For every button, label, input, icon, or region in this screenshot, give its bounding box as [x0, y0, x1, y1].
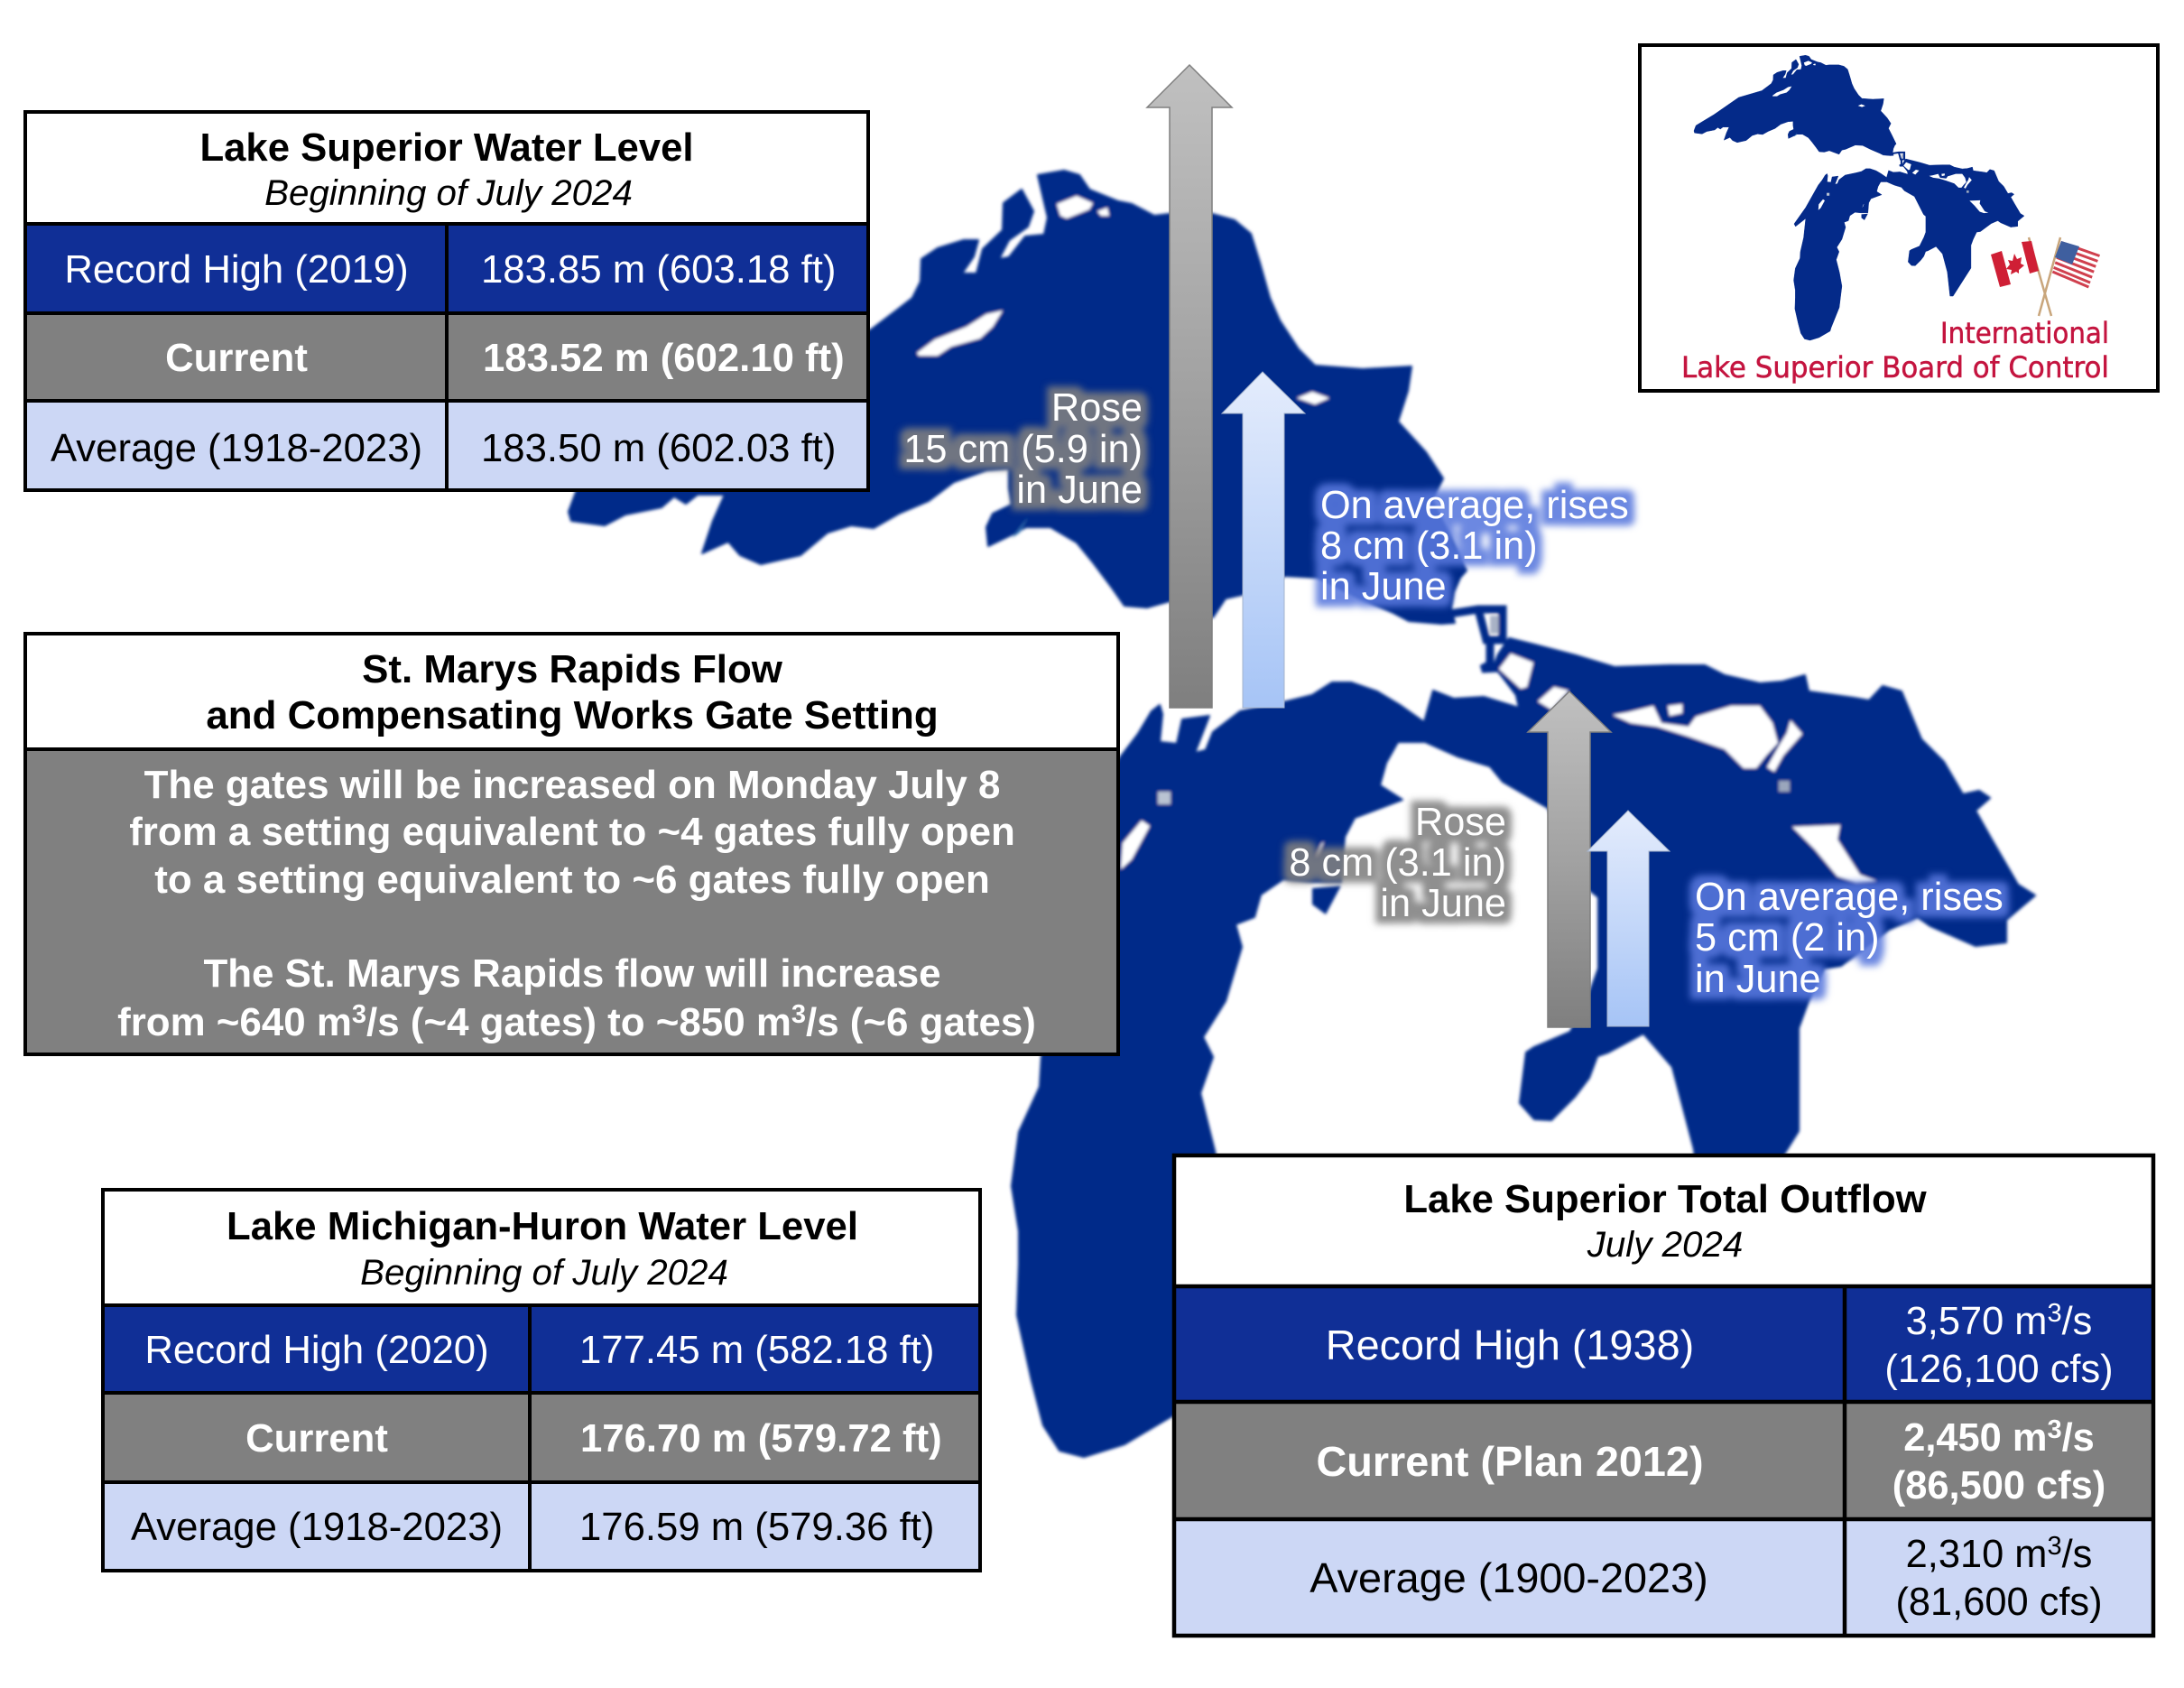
- row: record high: Record High (2019): [64, 247, 409, 292]
- row: record high: 177.45 m (582.18 ft): [579, 1328, 934, 1372]
- subheading: Beginning of July 2024: [264, 172, 633, 213]
- row: current: [165, 336, 845, 380]
- label: Lake Superior rose: 15 cm (5.9 in): [903, 428, 1143, 471]
- icon: Canadian flag: [1991, 241, 2039, 287]
- label: Michigan-Huron rose: [1289, 801, 1506, 925]
- heading: Lake Superior Water Level: [199, 125, 694, 170]
- heading: [206, 647, 939, 737]
- heading: Lake Superior Total Outflow: [1403, 1177, 1928, 1221]
- text: gate change: The gates will be increased on Monday July 8: [144, 763, 1000, 807]
- strait: St. Marys River channels: [1449, 609, 1523, 695]
- arrow: Michigan-Huron average rise: [1587, 811, 1670, 1026]
- text: flow change: /s (~6 gates): [806, 1000, 1036, 1044]
- text: gate change: from a setting equivalent to ~4 gates fully open: [129, 810, 1015, 854]
- row: current: Current (Plan 2012): [1316, 1438, 1704, 1485]
- lake: Superior: [569, 171, 1467, 624]
- row: record high: Record High (1938): [1326, 1322, 1694, 1368]
- row: average: Average (1918-2023): [51, 426, 422, 470]
- label: Michigan-Huron average: [1695, 876, 2004, 1001]
- text: gate change: [129, 763, 1015, 902]
- map: Great Lakes: [569, 171, 2035, 1457]
- label: Michigan-Huron average: in June: [1695, 958, 1821, 1001]
- row: record high: /s: [2062, 1300, 2092, 1343]
- label: Michigan-Huron average: On average, rises: [1695, 876, 2004, 919]
- row: average: [131, 1505, 934, 1549]
- row: current: 176.70 m (579.72 ft): [580, 1416, 942, 1461]
- row: current: 3: [2047, 1415, 2062, 1444]
- row: average: (81,600 cfs): [1895, 1581, 2103, 1624]
- bay: Grand Traverse: [1312, 886, 1341, 914]
- panel: Lake Superior Total Outflow: [1173, 1155, 2154, 1636]
- row: average: Average (1918-2023): [131, 1505, 503, 1549]
- subheading: July 2024: [1587, 1224, 1743, 1265]
- row: record high: 3: [2047, 1299, 2062, 1328]
- icon: Great Lakes silhouette: [1694, 55, 2024, 340]
- row: current: [245, 1416, 942, 1461]
- row: current: 2,450 m: [1903, 1416, 2047, 1460]
- row: record high: [64, 247, 836, 292]
- heading: St. Marys Rapids Flow: [362, 647, 783, 691]
- row: average: 2,310 m: [1906, 1533, 2047, 1576]
- text: flow change: from ~640 m: [117, 1000, 352, 1044]
- text: flow change: The St. Marys Rapids flow will increase: [203, 951, 941, 996]
- row: average: 176.59 m (579.36 ft): [579, 1505, 934, 1549]
- arrow: Lake Superior actual rise: [1147, 65, 1232, 708]
- panel: Lake Michigan-Huron Water Level: [102, 1189, 981, 1571]
- text: logo name: International: [1940, 316, 2109, 350]
- logo: International Lake Superior Board of Control: [1640, 45, 2158, 391]
- text: logo name: [1681, 316, 2109, 385]
- label: Michigan-Huron rose: in June: [1380, 882, 1506, 925]
- subheading: Beginning of July 2024: [360, 1252, 728, 1293]
- row: current: Current: [245, 1416, 388, 1461]
- text: flow change: [117, 951, 1036, 1044]
- label: Lake Superior rose: Rose: [1051, 386, 1143, 430]
- row: average: [1309, 1532, 2103, 1624]
- row: current: 183.52 m (602.10 ft): [483, 336, 845, 380]
- label: Lake Superior average: 8 cm (3.1 in): [1320, 524, 1538, 568]
- text: logo name: Lake Superior Board of Control: [1681, 350, 2109, 385]
- label: Michigan-Huron average: 5 cm (2 in): [1695, 916, 1879, 960]
- text: flow change: /s (~4 gates) to ~850 m: [366, 1000, 791, 1044]
- label: Lake Superior average: in June: [1320, 565, 1447, 608]
- label: Lake Superior rose: in June: [1016, 468, 1143, 512]
- row: average: [51, 426, 836, 470]
- label: Lake Superior rose: [903, 386, 1143, 512]
- row: current: [1316, 1415, 2105, 1507]
- panel: Lake Superior Water Level: [24, 111, 869, 492]
- text: flow change: 3: [352, 1000, 366, 1029]
- row: current: /s: [2062, 1416, 2095, 1460]
- row: average: 183.50 m (602.03 ft): [481, 426, 836, 470]
- heading: and Compensating Works Gate Setting: [206, 693, 939, 737]
- row: record high: [144, 1328, 934, 1372]
- row: average: /s: [2062, 1533, 2092, 1576]
- text: flow change: 3: [791, 1000, 806, 1029]
- panel: St. Marys Rapids Flow and Gate Setting: [24, 633, 1119, 1054]
- label: Lake Superior average: [1320, 484, 1629, 608]
- arrow: Lake Superior average rise: [1222, 372, 1305, 708]
- row: record high: 3,570 m: [1906, 1300, 2047, 1343]
- row: current: (86,500 cfs): [1892, 1464, 2105, 1507]
- row: record high: (126,100 cfs): [1884, 1348, 2114, 1391]
- heading: Lake Michigan-Huron Water Level: [227, 1204, 858, 1248]
- row: record high: 183.85 m (603.18 ft): [481, 247, 836, 292]
- row: current: Current: [165, 336, 308, 380]
- islands and land holes: [917, 196, 1876, 883]
- label: Michigan-Huron rose: Rose: [1415, 801, 1506, 844]
- label: Michigan-Huron rose: 8 cm (3.1 in): [1289, 841, 1506, 885]
- label: Lake Superior average: On average, rises: [1320, 484, 1629, 527]
- icon: United States flag: [2052, 241, 2100, 288]
- icon: flag poles: [2029, 237, 2060, 316]
- row: average: Average (1900-2023): [1309, 1554, 1708, 1601]
- row: record high: [1326, 1299, 2114, 1391]
- text: gate change: to a setting equivalent to ~6 gates fully open: [154, 858, 990, 902]
- row: average: 3: [2047, 1532, 2062, 1561]
- arrow: Michigan-Huron actual rise: [1528, 691, 1611, 1027]
- lake: Michigan and Huron with Georgian Bay: [1012, 638, 2035, 1457]
- row: record high: Record High (2020): [144, 1328, 489, 1372]
